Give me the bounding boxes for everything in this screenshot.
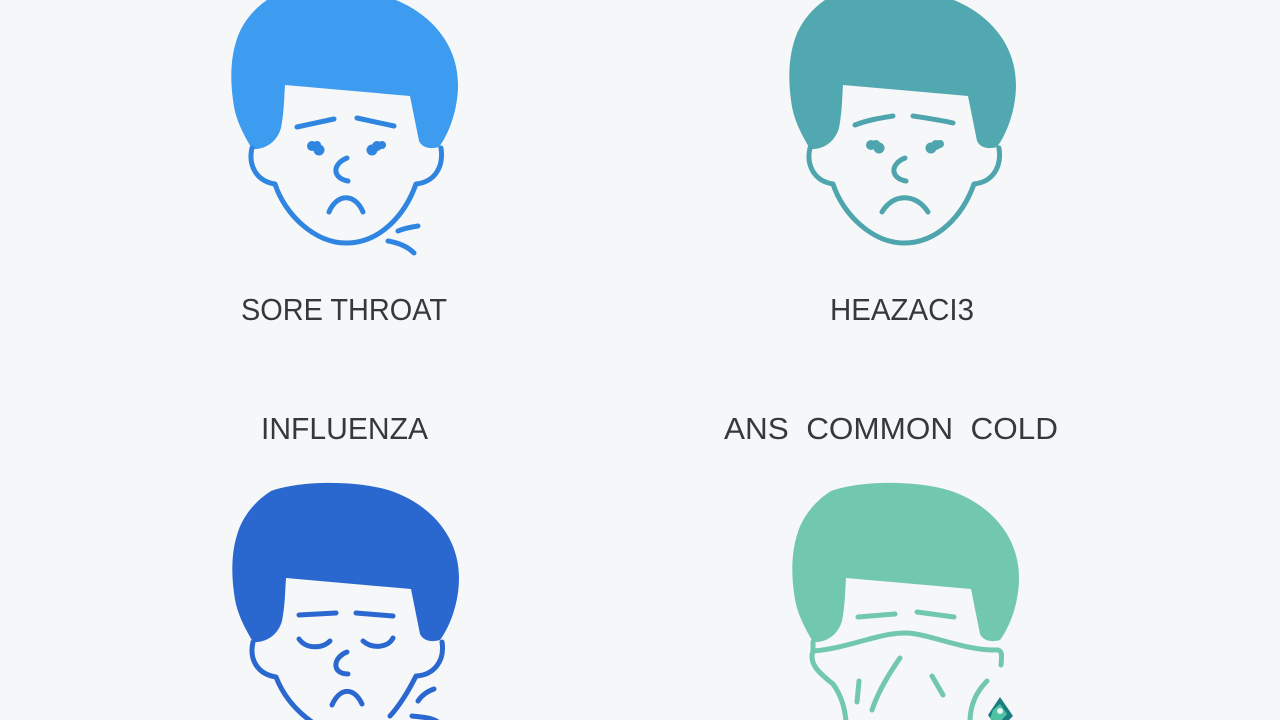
nose <box>894 158 906 181</box>
nose <box>336 158 348 181</box>
face outline <box>252 642 442 720</box>
closed eyes <box>299 638 393 647</box>
label: headache: HEAZACI3 <box>830 292 974 327</box>
panel: influenza <box>232 411 459 720</box>
hair <box>231 0 458 149</box>
mouth <box>329 198 363 212</box>
icon: blue face with sore throat <box>231 0 458 253</box>
eyebrows <box>297 118 394 127</box>
icon: teal face with headache <box>789 0 1016 243</box>
icon: blue face with influenza <box>232 483 459 720</box>
eyes <box>307 141 386 156</box>
nose <box>336 652 348 674</box>
eyebrows <box>299 613 393 616</box>
face outline <box>809 148 1000 243</box>
label: common cold: ANS COMMON COLD <box>724 411 1058 446</box>
face outline <box>251 148 442 243</box>
throat marks <box>418 689 434 701</box>
badge <box>988 697 1013 720</box>
eyebrows <box>858 612 954 617</box>
eyebrows <box>855 116 953 125</box>
icon: green face with mask <box>792 483 1019 720</box>
mouth <box>332 691 362 705</box>
panel: common cold <box>724 411 1058 720</box>
mouth <box>882 198 928 212</box>
panel: sore throat <box>231 0 458 327</box>
mask folds <box>857 658 987 720</box>
hair <box>232 483 459 642</box>
hair <box>792 483 1019 642</box>
panel: headache <box>789 0 1016 327</box>
mask and face outline <box>812 633 1002 720</box>
label: sore throat: SORE THROAT <box>241 292 447 327</box>
eyes <box>866 140 944 154</box>
hair <box>789 0 1016 149</box>
throat marks <box>388 226 418 253</box>
label: influenza: INFLUENZA <box>261 411 428 446</box>
